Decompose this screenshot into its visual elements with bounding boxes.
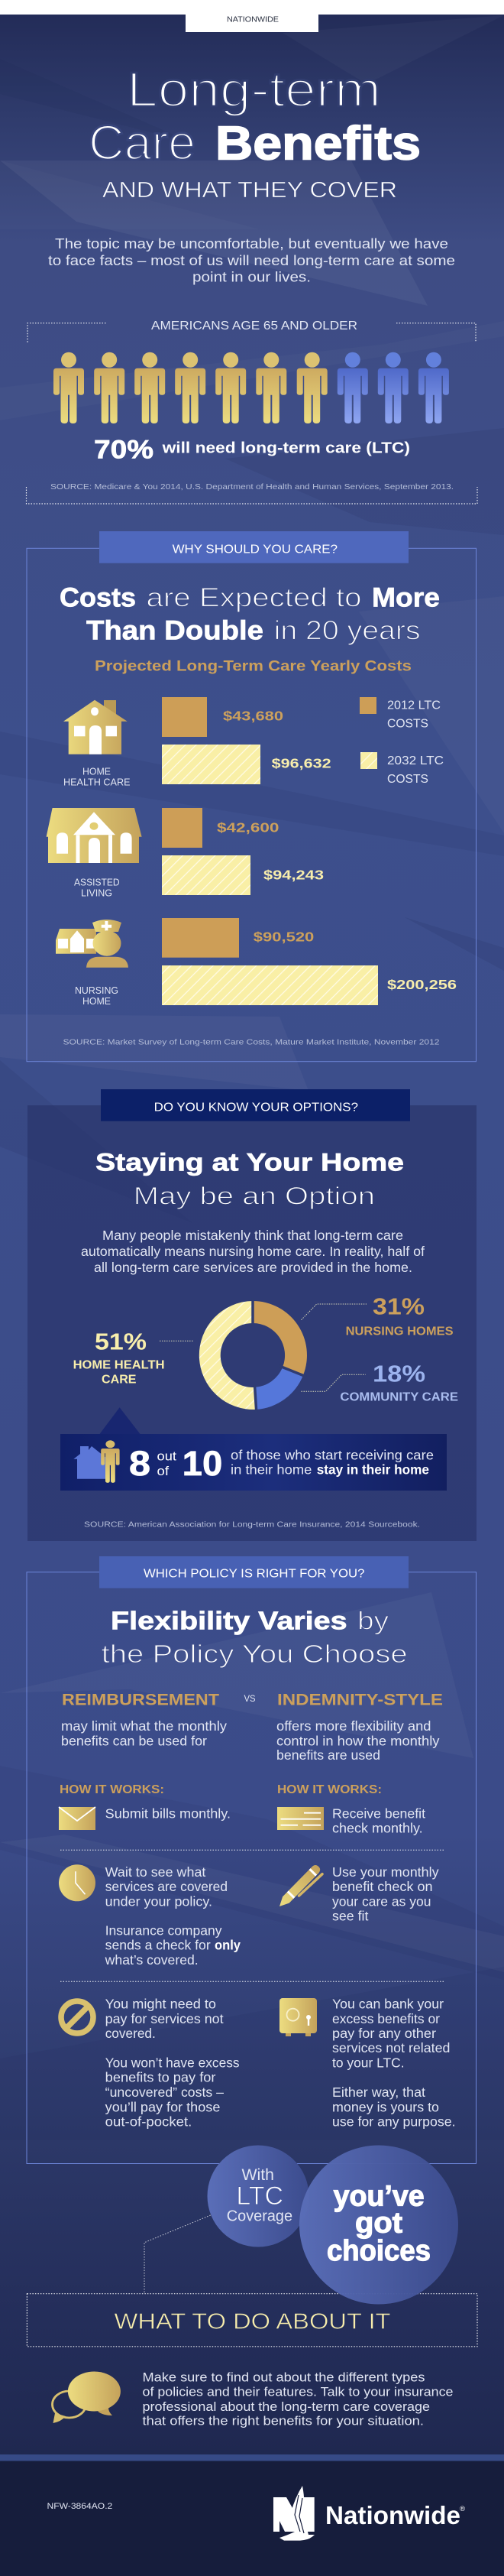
heading [102,1607,408,1668]
step: bank benefits: use for any purpose. [332,2114,455,2129]
section tag: WHY SHOULD YOU CARE? [173,543,338,556]
logo: Nationwide: Nationwide [325,2501,460,2529]
column: indemnity-style intro: INDEMNITY-STYLE [277,1691,443,1709]
step: use check: see fit [332,1908,369,1923]
heading: AMERICANS AGE 65 AND OLDER [151,320,357,333]
subheadings [60,1783,382,1796]
step: pay uncovered costs: out-of-pocket. [105,2114,192,2129]
legend: COSTS [387,718,428,731]
icon: clock [59,1864,95,1901]
heading: Costs [60,582,136,612]
icon: person and house [73,1440,120,1483]
callout: 8 out of 10: stay in their home [317,1462,429,1478]
legend: COSTS [387,773,428,786]
callout: 8 out of 10: 8 [129,1444,150,1483]
heading: the Policy You Choose [102,1640,408,1668]
step: bank benefits: Either way, that [332,2084,425,2100]
heading [60,582,440,646]
subheadings: HOW IT WORKS: [277,1783,382,1796]
label: 31% nursing homes [301,1293,454,1338]
stat: 70% [94,435,410,464]
circle: you've got choices: got [355,2208,402,2240]
legend [360,697,444,786]
step: receive benefit check: Receive benefit [332,1805,425,1821]
row: home health care [63,697,331,787]
circle: with LTC coverage [208,2145,309,2247]
heading box [27,2294,477,2347]
row: home health care: HOME [82,765,111,777]
label: 51% home health care: HOME HEALTH [73,1358,165,1371]
panel: why should you care [27,531,477,1062]
panel: which policy is right for you [27,1556,477,2163]
step: wait for coverage: what’s covered. [105,1952,199,1968]
circle: with LTC coverage: Coverage [227,2208,292,2224]
step: use check: Use your monthly [332,1864,439,1880]
step: use check: your care as you [332,1893,431,1909]
legend: 2032 LTC [387,754,444,767]
icon: house [63,700,128,754]
heading box: WHAT TO DO ABOUT IT [115,2310,391,2334]
logo: Nationwide [273,2486,465,2541]
step: wait for coverage: only [215,1938,241,1953]
heading: are Expected to [147,582,362,612]
label: 31% nursing homes: 31% [373,1293,425,1319]
step: bank benefits: excess benefits or [332,2011,440,2026]
panel: Americans age 65 and older [26,320,477,504]
chart title: Projected Long-Term Care Yearly Costs [95,657,412,674]
row: home health care: $43,680 [223,709,283,724]
icon: prohibited sign [61,2001,93,2033]
column: reimbursement intro: may limit what the monthly [61,1718,227,1734]
bars [162,918,239,958]
row: assisted living: LIVING [81,887,112,899]
circle: with LTC coverage: With [241,2166,274,2184]
icon: nurse and building [56,920,128,968]
top tab: NATIONWIDE [227,15,279,24]
step: bank benefits: services not related [332,2040,450,2055]
step: bank benefits: pay for any other [332,2026,436,2041]
footer [0,2454,504,2576]
step: wait for coverage: under your policy. [105,1893,212,1909]
step: pay uncovered costs: pay for services not [105,2011,224,2026]
circle: you've got choices: choices [327,2235,431,2267]
row: nursing home: HOME [82,995,111,1007]
column: indemnity-style intro [276,1691,443,1763]
step: use check [276,1864,439,1923]
title [89,62,421,203]
step: bank benefits: to your LTC. [332,2055,405,2070]
step: pay uncovered costs: “uncovered” costs – [105,2084,224,2100]
circle: you've got choices: you’ve [334,2180,425,2212]
column: reimbursement intro: REIMBURSEMENT [62,1691,219,1709]
icon: assisted living building [47,808,142,863]
step: receive benefit check [277,1805,425,1835]
title: Long-term [127,62,381,117]
column: reimbursement intro: benefits can be used for [61,1733,207,1748]
icon: check [277,1807,324,1830]
vs: VS [244,1693,256,1704]
circle: you've got choices [299,2145,458,2304]
pictogram: 7 of 10 people [53,352,449,423]
advice text: professional about the long-term care coverage [142,2399,430,2414]
source: SOURCE: American Association for Long-term Care Insurance, 2014 Sourcebook. [84,1520,420,1530]
row: assisted living: ASSISTED [74,876,120,887]
step: pay uncovered costs: You might need to [105,1997,216,2012]
row: assisted living [47,808,324,899]
row: nursing home: $200,256 [387,977,457,992]
step: wait for coverage: sends a check for [105,1938,211,1953]
section tag: WHICH POLICY IS RIGHT FOR YOU? [144,1567,364,1580]
intro text: to face facts – most of us will need long-term care at some [48,252,455,268]
title: Benefits [215,118,421,170]
stat: 70%: will need long-term care (LTC) [161,440,410,457]
heading: Flexibility Varies [111,1607,347,1635]
title: AND WHAT THEY COVER [102,178,397,203]
icon: safe [279,1998,317,2036]
column: indemnity-style intro: offers more flexibility and [276,1718,431,1734]
heading: More [372,582,440,612]
bars [162,697,207,737]
label: 51% home health care: 51% [95,1328,147,1355]
callout: 8 out of 10: out [157,1449,176,1464]
row: home health care: HEALTH CARE [63,776,131,787]
document code: NFW-3864AO.2 [47,2502,112,2511]
panel: what to do about it [27,2145,477,2428]
circle: with LTC coverage: LTC [236,2182,283,2211]
step: wait for coverage: services are covered [105,1879,228,1894]
icon: envelope [59,1807,95,1830]
callout: 8 out of 10: of [157,1464,169,1478]
advice text: Make sure to find out about the different types [142,2370,425,2385]
row: assisted living: $94,243 [263,868,324,883]
step: bank benefits: You can bank your [332,1997,444,2012]
row: nursing home: NURSING [75,985,118,996]
description: all long-term care services are provided in the home. [94,1260,412,1275]
section tag [99,1556,409,1588]
row: nursing home: $90,520 [254,930,315,945]
section tag [101,1089,410,1121]
bars [162,808,202,848]
dotted frame [26,323,477,504]
column: indemnity-style intro: control in how the monthly [276,1733,440,1748]
step: pay uncovered costs: covered. [105,2026,156,2041]
dotted connector [144,2215,211,2293]
logo: Nationwide: ® [460,2505,465,2513]
heading [95,1148,404,1209]
step: wait for coverage [59,1864,241,1968]
description [81,1228,425,1275]
panel: do you know your options [27,1089,477,1541]
step: pay uncovered costs: you’ll pay for those [105,2099,220,2114]
legend: 2012 LTC [387,699,441,712]
intro text: The topic may be uncomfortable, but eventually we have [55,235,448,251]
advice text: of policies and their features. Talk to your insurance [142,2385,454,2399]
step: submit bills: Submit bills monthly. [105,1805,231,1821]
row: assisted living: $42,600 [217,820,279,835]
heading: by [357,1607,389,1635]
label: 51% home health care [73,1328,194,1387]
column: reimbursement intro [61,1691,227,1748]
step: use check: benefit check on [332,1879,433,1894]
step: pay uncovered costs: benefits to pay for [105,2070,216,2085]
step: wait for coverage: Wait to see what [105,1864,206,1880]
step: pay uncovered costs [61,1997,240,2129]
step: bank benefits [279,1997,455,2129]
advice text [142,2370,454,2428]
source: SOURCE: Market Survey of Long-term Care Costs, Mature Market Institute, November 2012 [63,1038,440,1047]
subheadings: HOW IT WORKS: [60,1783,164,1796]
step: pay uncovered costs: You won’t have excess [105,2055,240,2070]
heading: May be an Option [134,1182,375,1209]
section tag [99,531,409,563]
donut chart [199,1298,307,1413]
intro text: point in our lives. [192,269,311,285]
column: indemnity-style intro: benefits are used [276,1747,380,1763]
title: Care [89,115,195,170]
heading: Than Double [86,616,263,646]
heading: Staying at Your Home [95,1148,404,1176]
step: submit bills [59,1805,231,1830]
advice text: that offers the right benefits for your situation. [142,2414,424,2428]
step: receive benefit check: check monthly. [332,1820,423,1835]
icon: speech bubbles [52,2371,121,2423]
label: 51% home health care: CARE [102,1374,136,1387]
callout: 8 out of 10: 10 [183,1444,222,1483]
row: home health care: $96,632 [272,755,331,771]
source: SOURCE: Medicare & You 2014, U.S. Department of Health and Human Services, September 2013. [50,482,454,492]
section tag: DO YOU KNOW YOUR OPTIONS? [154,1101,358,1114]
label: 18% community care: 18% [373,1360,425,1387]
label: 31% nursing homes: NURSING HOMES [346,1325,454,1338]
callout: 8 out of 10: in their home [231,1462,312,1478]
row: nursing home [56,918,457,1007]
icon: pen [276,1864,322,1909]
callout: 8 out of 10 [60,1407,447,1491]
heading: in 20 years [274,616,421,646]
callout: 8 out of 10: of those who start receiving care [231,1447,434,1462]
label: 18% community care [301,1360,458,1404]
intro text [48,235,455,285]
description: automatically means nursing home care. In reality, half of [81,1244,425,1259]
stat: 70%: 70% [94,435,153,464]
step: wait for coverage: Insurance company [105,1923,222,1938]
step: bank benefits: money is yours to [332,2099,439,2114]
top tab [186,15,318,32]
description: Many people mistakenly think that long-term care [102,1228,403,1243]
label: 18% community care: COMMUNITY CARE [340,1391,458,1404]
